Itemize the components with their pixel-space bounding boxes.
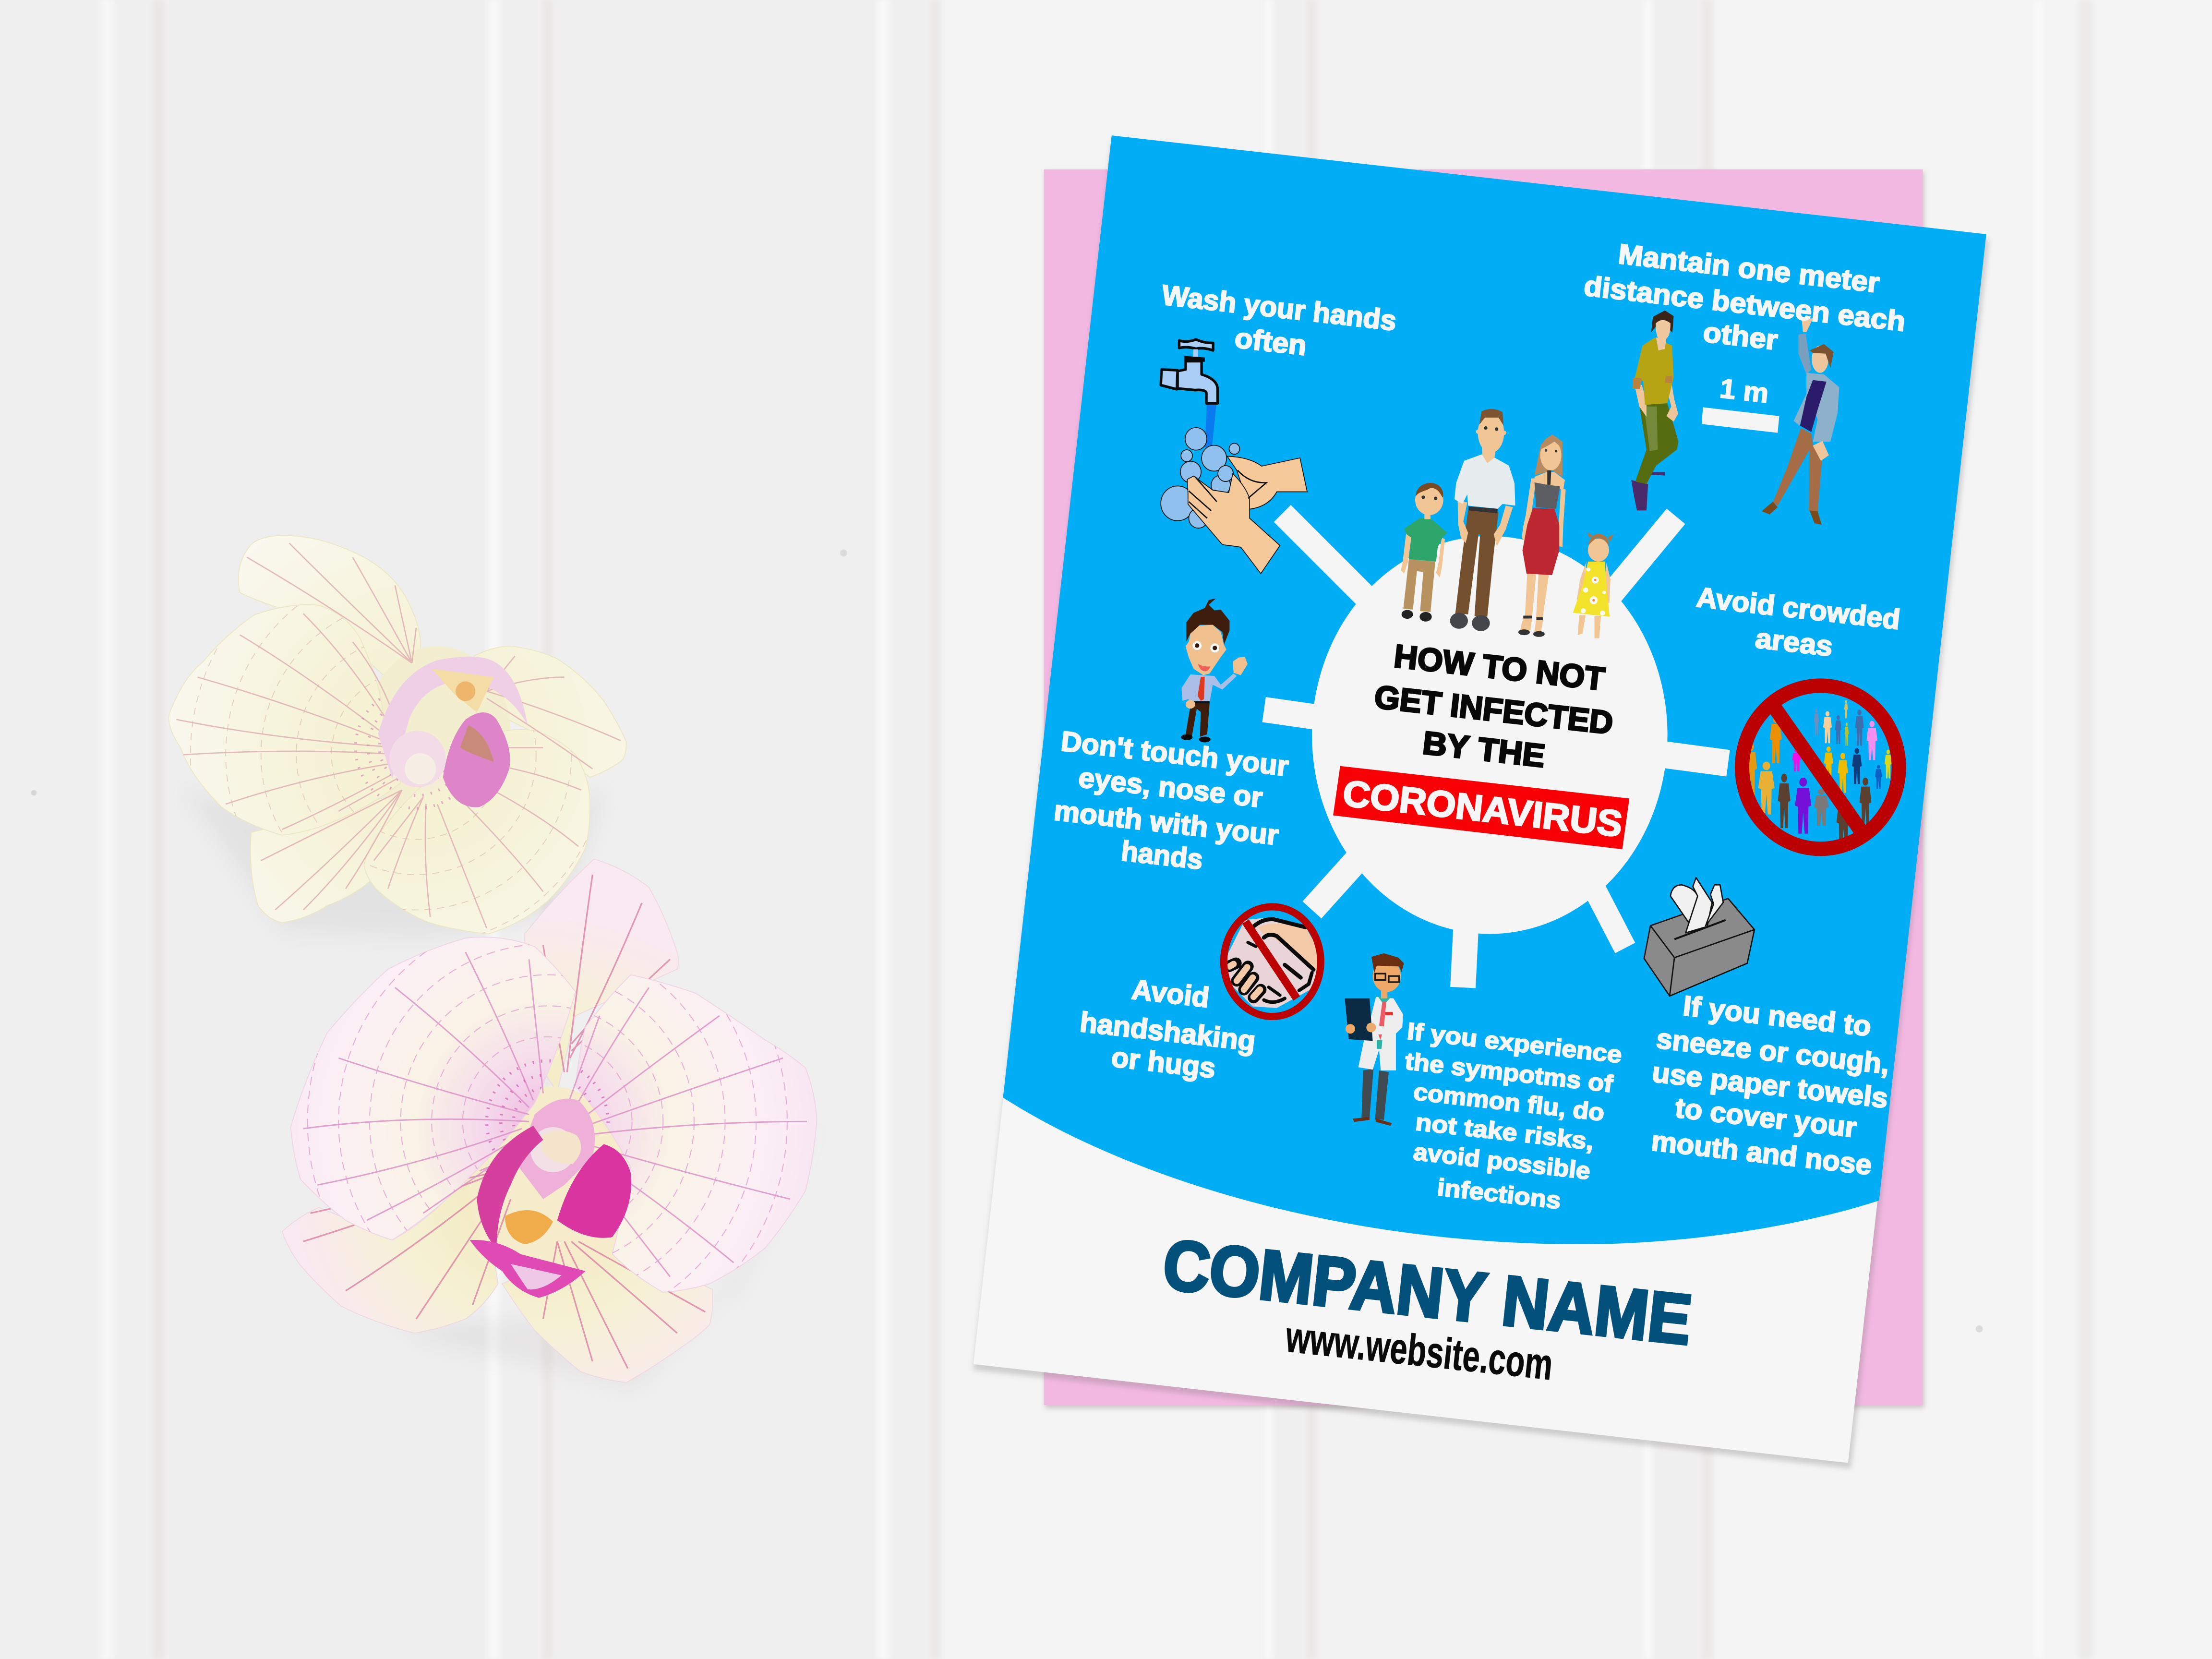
sepals (282, 859, 713, 1382)
text: sneeze or cough (1650, 990, 1891, 1181)
text: avoid handshaking (1078, 974, 1257, 1084)
mother (1518, 434, 1566, 637)
lip (378, 657, 528, 807)
icon: tissue box (1644, 878, 1755, 996)
flyer (974, 135, 1989, 1468)
text: avoid handshaking: handshaking (1078, 1007, 1257, 1057)
text: flu symptoms: avoid possible (1412, 1138, 1592, 1185)
text: sneeze or cough: mouth and nose (1650, 1125, 1874, 1181)
text: flu symptoms: common flu, do (1412, 1078, 1606, 1126)
icon: no handshake (1222, 907, 1322, 1017)
title: GET INFECTED (1372, 679, 1615, 741)
text: flu symptoms (1404, 1018, 1623, 1214)
text: sneeze or cough: If you need to (1682, 990, 1873, 1042)
text: avoid crowded areas: areas (1754, 623, 1834, 662)
illustration: doctor (1345, 953, 1404, 1126)
one metre label: 1 m (1719, 373, 1770, 409)
text: sneeze or cough: use paper towels (1650, 1057, 1889, 1114)
little girl in yellow dress (1573, 532, 1614, 638)
text: wash your hands: Wash your hands (1160, 279, 1398, 337)
title (1372, 638, 1615, 774)
text: avoid crowded areas (1695, 582, 1902, 662)
text: wash your hands: often (1233, 323, 1308, 361)
text: maintain distance: Mantain one meter (1617, 239, 1881, 299)
blue panel with curved base (1003, 135, 1986, 1244)
text: avoid crowded areas: Avoid crowded (1695, 582, 1902, 636)
title: HOW TO NOT (1392, 638, 1607, 697)
fine vein net (307, 944, 788, 1292)
icon: tap and washing hands (1161, 339, 1307, 574)
illustration: two people at one metre (1631, 311, 1839, 525)
coronavirus banner: CORONAVIRUS (1341, 773, 1624, 845)
text: avoid handshaking: or hugs (1110, 1042, 1217, 1084)
icon: no handshake, and doctor (1222, 907, 1404, 1126)
pink backing card (1044, 169, 1924, 1408)
prohibition sign (1742, 685, 1899, 849)
boy in green (1401, 483, 1447, 622)
silhouettes (1745, 700, 1892, 850)
text: maintain distance (1582, 239, 1907, 356)
text: flu symptoms: If you experience (1406, 1018, 1623, 1068)
lip (470, 1099, 631, 1298)
icon: no crowds (1742, 685, 1899, 850)
text: do not touch your face: Don't touch your (1059, 726, 1290, 782)
upper orchid (168, 535, 627, 934)
fine vein net (190, 606, 587, 933)
sepal veins (303, 875, 705, 1369)
text: maintain distance: other (1702, 317, 1779, 356)
one metre bar (1702, 407, 1779, 433)
sepal petals (169, 536, 626, 934)
man in blue jacket (1762, 318, 1839, 525)
website: www.website.com (1283, 1312, 1555, 1389)
man in yellow shirt (1631, 311, 1679, 510)
central virus shape with spokes (1264, 514, 1728, 987)
petals (290, 937, 817, 1292)
family illustration (1401, 409, 1614, 638)
veins (176, 543, 621, 928)
illustration: waving cartoon man (1181, 599, 1248, 742)
text: sneeze or cough: to cover your (1674, 1092, 1858, 1143)
text: flu symptoms: the sympotms of (1404, 1047, 1614, 1097)
veins (303, 952, 807, 1277)
title: BY THE (1421, 725, 1547, 774)
text: wash your hands (1160, 279, 1398, 361)
lower orchid (282, 859, 825, 1390)
flyer paper (974, 135, 1986, 1463)
company name: COMPANY NAME (1159, 1225, 1695, 1359)
text: do not touch your face: eyes, nose or (1077, 762, 1264, 814)
text: flu symptoms: not take risks, (1414, 1108, 1595, 1155)
text: avoid handshaking: Avoid (1130, 974, 1211, 1013)
text: flu symptoms: infections (1436, 1174, 1562, 1214)
text: do not touch your face: mouth with your (1052, 795, 1280, 851)
father (1450, 409, 1515, 631)
text: do not touch your face (1052, 726, 1290, 876)
text: sneeze or cough: sneeze or cough, (1655, 1023, 1891, 1080)
text: do not touch your face: hands (1119, 835, 1204, 876)
text: maintain distance: distance between each (1582, 270, 1907, 337)
